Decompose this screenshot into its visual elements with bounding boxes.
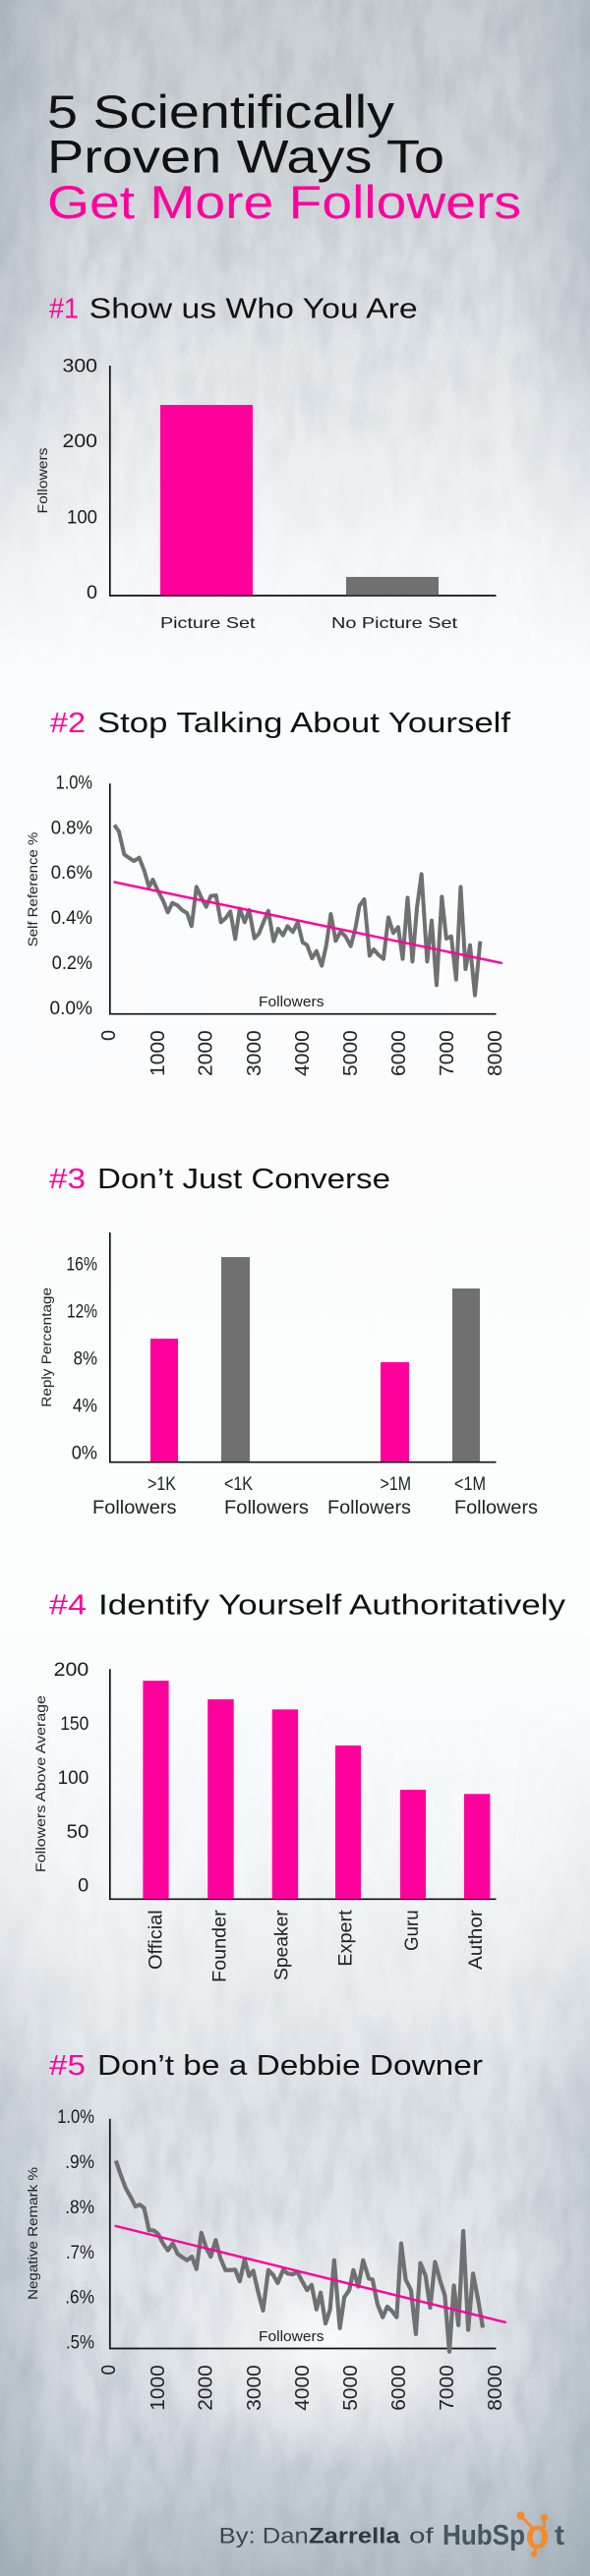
line chart: self reference vs followers: Self Reference %: [25, 832, 40, 946]
line chart: self reference vs followers: 1000: [148, 1030, 169, 1076]
line chart: self reference vs followers: 0.4%: [51, 908, 92, 929]
bar chart: followers above average: Expert: [335, 1910, 356, 1967]
line chart: self reference vs followers: 8000: [485, 1030, 506, 1076]
bar chart: followers by picture set: Picture Set: [160, 615, 256, 632]
bar chart: reply percentage: <1K: [224, 1474, 253, 1495]
bar chart: reply percentage: Followers: [92, 1498, 177, 1518]
line chart: self reference vs followers: 4000: [292, 1030, 314, 1076]
line chart: self reference vs followers: Followers: [259, 995, 324, 1010]
bar chart: reply percentage: 16%: [66, 1255, 97, 1276]
panel: #2 stop talking about yourself: [25, 708, 511, 1076]
bar chart: followers above average: [32, 1660, 496, 1982]
bar chart: followers by picture set: [35, 357, 496, 632]
heading #1: Show us Who You Are: [89, 293, 418, 324]
bar chart: followers by picture set: No Picture Set: [331, 615, 458, 632]
bar chart: reply percentage: Followers: [327, 1498, 411, 1518]
line chart: negative remarks vs followers: .7%: [66, 2243, 94, 2263]
panel: #3 don't just converse: [38, 1164, 538, 1518]
heading #5: Don’t be a Debbie Downer: [97, 2050, 483, 2082]
line chart: negative remarks vs followers: 1000: [148, 2365, 169, 2411]
bar chart: followers by picture set: 100: [67, 507, 97, 529]
line chart: negative remarks vs followers: .5%: [66, 2333, 94, 2353]
bar chart: reply percentage: 0%: [72, 1444, 97, 1464]
bar chart: reply percentage: 8%: [74, 1349, 97, 1370]
bar chart: followers above average: 50: [67, 1822, 88, 1843]
bar chart: followers above average: Official: [146, 1910, 166, 1970]
title: [47, 86, 521, 228]
line chart: negative remarks vs followers: [25, 2107, 506, 2411]
bar chart: reply percentage: <1M: [454, 1474, 486, 1495]
line chart: negative remarks vs followers: 7000: [437, 2365, 458, 2411]
heading #2: #2: [50, 708, 86, 739]
line chart: self reference vs followers: 0.6%: [51, 863, 92, 884]
logo: HubSpot wordmark with sprocket: o: [525, 2510, 549, 2557]
footer: credit line: By: Dan: [219, 2524, 309, 2548]
panel: #5 don't be a debbie downer: [25, 2050, 506, 2411]
line chart: self reference vs followers: 2000: [195, 1030, 216, 1076]
bar chart: reply percentage: 12%: [67, 1302, 97, 1323]
heading #4: Identify Yourself Authoritatively: [98, 1589, 566, 1621]
heading #1: #1: [49, 293, 79, 324]
panel: #4 identify yourself authoritatively: [32, 1589, 566, 1982]
heading #4: #4: [49, 1589, 87, 1621]
line chart: self reference vs followers: 6000: [388, 1030, 410, 1076]
bar chart: followers by picture set: 300: [63, 357, 97, 377]
footer: credit line: Zarrella: [309, 2524, 401, 2548]
line chart: negative remarks vs followers: .8%: [65, 2198, 94, 2218]
bar chart: followers above average: Followers Above Average: [32, 1695, 48, 1872]
line chart: self reference vs followers: 1.0%: [56, 773, 92, 793]
bar chart: reply percentage: Followers: [454, 1498, 538, 1518]
panel: #1 show us who you are: [35, 293, 496, 632]
bar chart: followers by picture set: 200: [63, 431, 97, 452]
bar chart: reply percentage: Followers: [224, 1498, 309, 1518]
bar chart: followers by picture set: Followers: [35, 447, 50, 513]
bar chart: followers above average: 150: [60, 1714, 88, 1735]
logo: HubSpot wordmark with sprocket: t: [555, 2520, 564, 2551]
bar chart: followers above average: Author: [466, 1910, 487, 1970]
line chart: self reference vs followers: 5000: [340, 1030, 362, 1076]
bar chart: followers above average: Founder: [209, 1910, 230, 1982]
line chart: negative remarks vs followers: 8000: [485, 2365, 506, 2411]
heading #2: Stop Talking About Yourself: [97, 708, 511, 739]
title: Proven Ways To: [47, 131, 444, 183]
bar chart: reply percentage: >1M: [380, 1474, 411, 1495]
line chart: self reference vs followers: 0.0%: [49, 999, 92, 1019]
line chart: negative remarks vs followers: 1.0%: [57, 2107, 94, 2128]
bar chart: reply percentage: Reply Percentage: [38, 1288, 54, 1407]
line chart: negative remarks vs followers: 0: [98, 2365, 120, 2375]
line chart: negative remarks vs followers: Followers: [259, 2329, 324, 2345]
line chart: self reference vs followers: 3000: [244, 1030, 266, 1076]
bar chart: followers above average: Guru: [402, 1910, 423, 1951]
line chart: self reference vs followers: 0: [98, 1030, 120, 1041]
bar chart: reply percentage: 4%: [73, 1397, 97, 1417]
title: 5 Scientifically: [47, 86, 395, 138]
bar chart: followers above average: 100: [58, 1768, 88, 1789]
heading #5: #5: [49, 2050, 86, 2082]
bar chart: followers above average: Speaker: [271, 1910, 292, 1980]
line chart: negative remarks vs followers: 4000: [292, 2365, 314, 2411]
bar chart: followers above average: 200: [54, 1660, 88, 1681]
footer: credit line: of: [409, 2524, 435, 2548]
line chart: negative remarks vs followers: Negative Remark %: [25, 2167, 40, 2300]
line chart: negative remarks vs followers: 2000: [195, 2365, 216, 2411]
line chart: self reference vs followers: 7000: [437, 1030, 458, 1076]
bar chart: reply percentage: [38, 1232, 538, 1518]
footer: credit line: [219, 2510, 564, 2557]
line chart: negative remarks vs followers: .9%: [65, 2152, 94, 2173]
line chart: self reference vs followers: 0.2%: [52, 953, 92, 974]
bar chart: followers above average: 0: [78, 1876, 88, 1897]
line chart: self reference vs followers: 0.8%: [51, 818, 92, 838]
logo: HubSpot wordmark with sprocket: HubSp: [442, 2520, 525, 2551]
line chart: negative remarks vs followers: .6%: [65, 2288, 94, 2309]
line chart: negative remarks vs followers: 5000: [340, 2365, 362, 2411]
heading #3: #3: [49, 1164, 86, 1195]
line chart: negative remarks vs followers: 6000: [388, 2365, 410, 2411]
bar chart: reply percentage: >1K: [148, 1474, 176, 1495]
title: Get More Followers: [47, 176, 521, 228]
heading #3: Don’t Just Converse: [97, 1164, 390, 1195]
line chart: negative remarks vs followers: 3000: [244, 2365, 266, 2411]
logo: HubSpot wordmark with sprocket: [442, 2510, 564, 2557]
line chart: self reference vs followers: [25, 773, 506, 1076]
bar chart: followers by picture set: 0: [87, 583, 97, 603]
